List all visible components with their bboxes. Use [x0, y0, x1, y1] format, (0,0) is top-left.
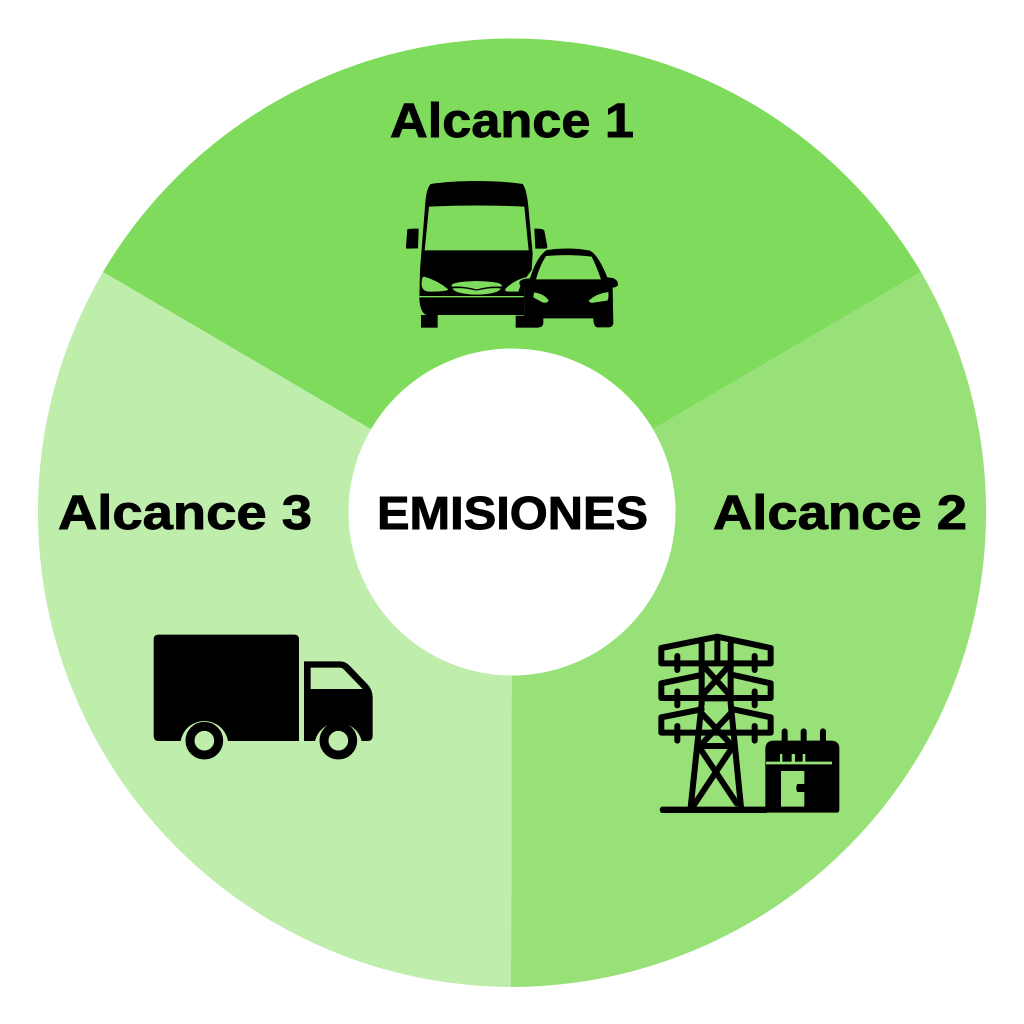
center circle: [348, 348, 676, 676]
heading: Alcance 2: Alcance 2: [713, 487, 967, 540]
segment: Alcance 3: [38, 272, 512, 987]
icon: van and car: [406, 181, 618, 328]
icon: transmission tower and transformer: [660, 637, 839, 813]
icon: delivery truck: [154, 635, 373, 755]
segment: Alcance 1: [103, 39, 921, 512]
segment: Alcance 2: [511, 272, 986, 987]
heading: Alcance 3: Alcance 3: [58, 487, 312, 540]
heading: Alcance 1: Alcance 1: [390, 95, 634, 148]
center label: EMISIONES: [377, 487, 648, 539]
